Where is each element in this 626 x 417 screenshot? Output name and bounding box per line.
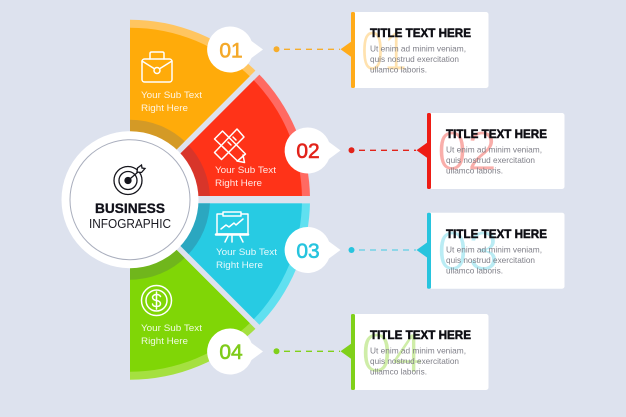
- card 03: quis nostrud exercitation: [446, 255, 535, 265]
- card 02: [416, 113, 564, 189]
- number badge 01: [207, 26, 263, 72]
- card 01: quis nostrud exercitation: [370, 54, 459, 64]
- text: business: BUSINESS: [95, 201, 165, 216]
- segment 1: orange: [130, 20, 256, 150]
- card 04: Ut enim ad minim veniam,: [370, 346, 466, 356]
- connector 03: [348, 247, 416, 253]
- text: segment 3 sub text: [216, 247, 277, 270]
- icon: presentation board: [216, 212, 248, 242]
- card 04: TITLE TEXT HERE: [370, 328, 471, 342]
- card 01: TITLE TEXT HERE: [370, 26, 471, 40]
- text: segment 4 sub text: [141, 323, 202, 346]
- card 02: quis nostrud exercitation: [446, 155, 535, 165]
- card 02: ullamco laboris.: [446, 166, 503, 176]
- icon: dollar coin: [142, 286, 172, 316]
- card 04: ullamco laboris.: [370, 366, 427, 376]
- number badge 04: [207, 328, 263, 374]
- segment 3: cyan: [180, 203, 310, 325]
- text: segment 2 sub text: Right Here: [215, 178, 262, 188]
- card 03: [416, 213, 564, 289]
- icon: ruler and pencil: [214, 129, 246, 162]
- connector 01: [274, 46, 340, 52]
- number badge 03: [285, 227, 340, 273]
- card 01: Ut enim ad minim veniam,: [370, 44, 466, 54]
- number badge 04: 04: [219, 341, 243, 364]
- icon: briefcase: [142, 52, 172, 82]
- number badge 02: 02: [296, 140, 320, 163]
- text: segment 4 sub text: Right Here: [141, 336, 188, 346]
- text: segment 4 sub text: Your Sub Text: [141, 323, 202, 333]
- card 04: 04: [361, 321, 423, 384]
- card 04: [340, 314, 488, 390]
- text: segment 1 sub text: Right Here: [141, 103, 188, 113]
- number badge 02: [285, 127, 340, 173]
- segment 2: red: [180, 74, 310, 196]
- text: segment 2 sub text: [215, 165, 276, 188]
- card 01: 01: [361, 19, 407, 82]
- connector 02: [348, 147, 416, 153]
- connector 04: [274, 348, 340, 354]
- card 03: 03: [437, 219, 499, 282]
- card 03: Ut enim ad minim veniam,: [446, 244, 542, 254]
- number badge 03: 03: [296, 240, 320, 263]
- card 02: TITLE TEXT HERE: [446, 127, 547, 141]
- text: segment 1 sub text: Your Sub Text: [141, 90, 202, 100]
- card 01: [340, 12, 488, 88]
- card 02: Ut enim ad minim veniam,: [446, 144, 542, 154]
- text: segment 3 sub text: Right Here: [216, 260, 263, 270]
- icon: target with arrow: [114, 165, 145, 194]
- center badge: [62, 131, 198, 268]
- card 02: 02: [437, 119, 497, 182]
- card 04: quis nostrud exercitation: [370, 356, 459, 366]
- text: segment 2 sub text: Your Sub Text: [215, 165, 276, 175]
- text: segment 3 sub text: Your Sub Text: [216, 247, 277, 257]
- number badge 01: 01: [219, 40, 243, 62]
- text: segment 1 sub text: [141, 90, 202, 113]
- segment 4: green: [130, 250, 256, 380]
- card 03: TITLE TEXT HERE: [446, 227, 547, 241]
- text: infographic: INFOGRAPHIC: [89, 217, 171, 231]
- card 03: ullamco laboris.: [446, 266, 503, 276]
- card 01: ullamco laboris.: [370, 64, 427, 74]
